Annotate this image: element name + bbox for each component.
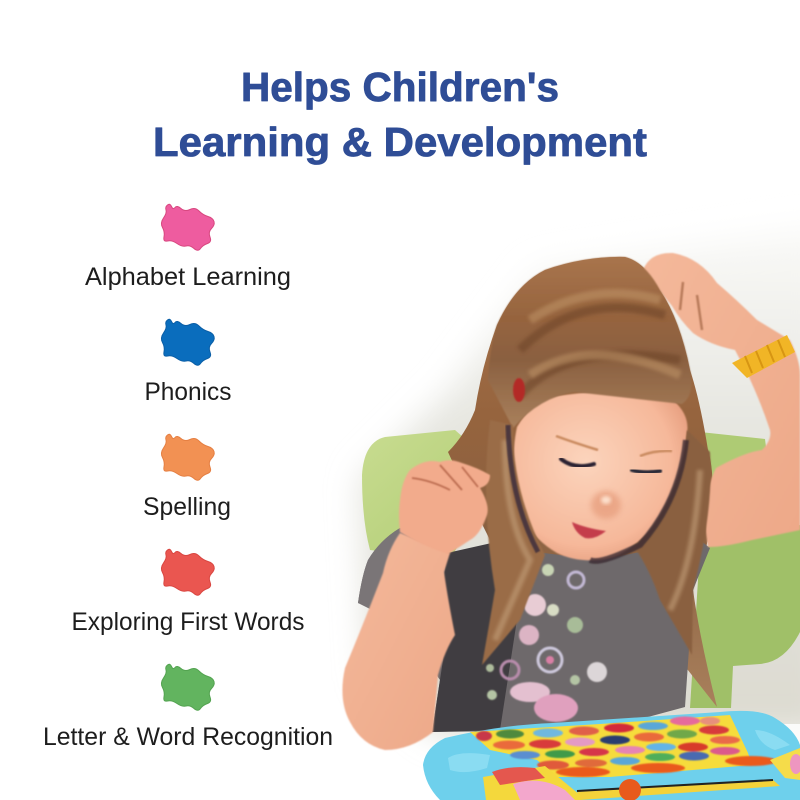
photo: girl playing with toy [342, 225, 800, 800]
girl's raised arm and hand [643, 253, 800, 547]
shirt flower print [486, 564, 607, 722]
finger shadows [680, 282, 702, 330]
wall backdrop [360, 225, 800, 735]
item: Phonics [144, 319, 232, 406]
item: Exploring First Words: Exploring First Words [72, 608, 304, 636]
item: Exploring First Words [72, 549, 304, 636]
list: learning skills [43, 204, 333, 751]
left hand [399, 460, 490, 554]
shirt [358, 528, 710, 732]
left front lock [482, 420, 545, 665]
hair clip [513, 378, 525, 402]
left arm [342, 533, 455, 750]
pig character panel [483, 766, 580, 800]
bracelet [732, 335, 795, 378]
toy body [423, 711, 800, 800]
hair bangs and strands [482, 257, 711, 665]
title: Helps Children's [241, 64, 559, 110]
item: Spelling [143, 434, 231, 521]
item: Alphabet Learning [85, 204, 291, 291]
item: Phonics: Phonics [144, 378, 232, 406]
table [690, 724, 800, 800]
face [513, 390, 687, 560]
item: Alphabet Learning: Alphabet Learning [85, 263, 291, 291]
hair back [448, 257, 717, 707]
item: Letter & Word Recognition: Letter & Word Recognition [43, 723, 333, 751]
orange knob [619, 779, 641, 800]
right front lock [635, 430, 711, 655]
black slot and page [577, 780, 780, 800]
eyebrows, eyes, nose, mouth [556, 436, 672, 538]
toy tablet [423, 711, 800, 800]
title [153, 64, 647, 165]
chair right [690, 432, 800, 708]
item: Spelling: Spelling [143, 493, 231, 521]
chair left [362, 430, 500, 560]
title: Learning & Development [153, 119, 647, 165]
item: Letter & Word Recognition [43, 664, 333, 751]
keys [476, 716, 777, 777]
yellow key panel [470, 715, 752, 777]
side character [770, 748, 800, 780]
